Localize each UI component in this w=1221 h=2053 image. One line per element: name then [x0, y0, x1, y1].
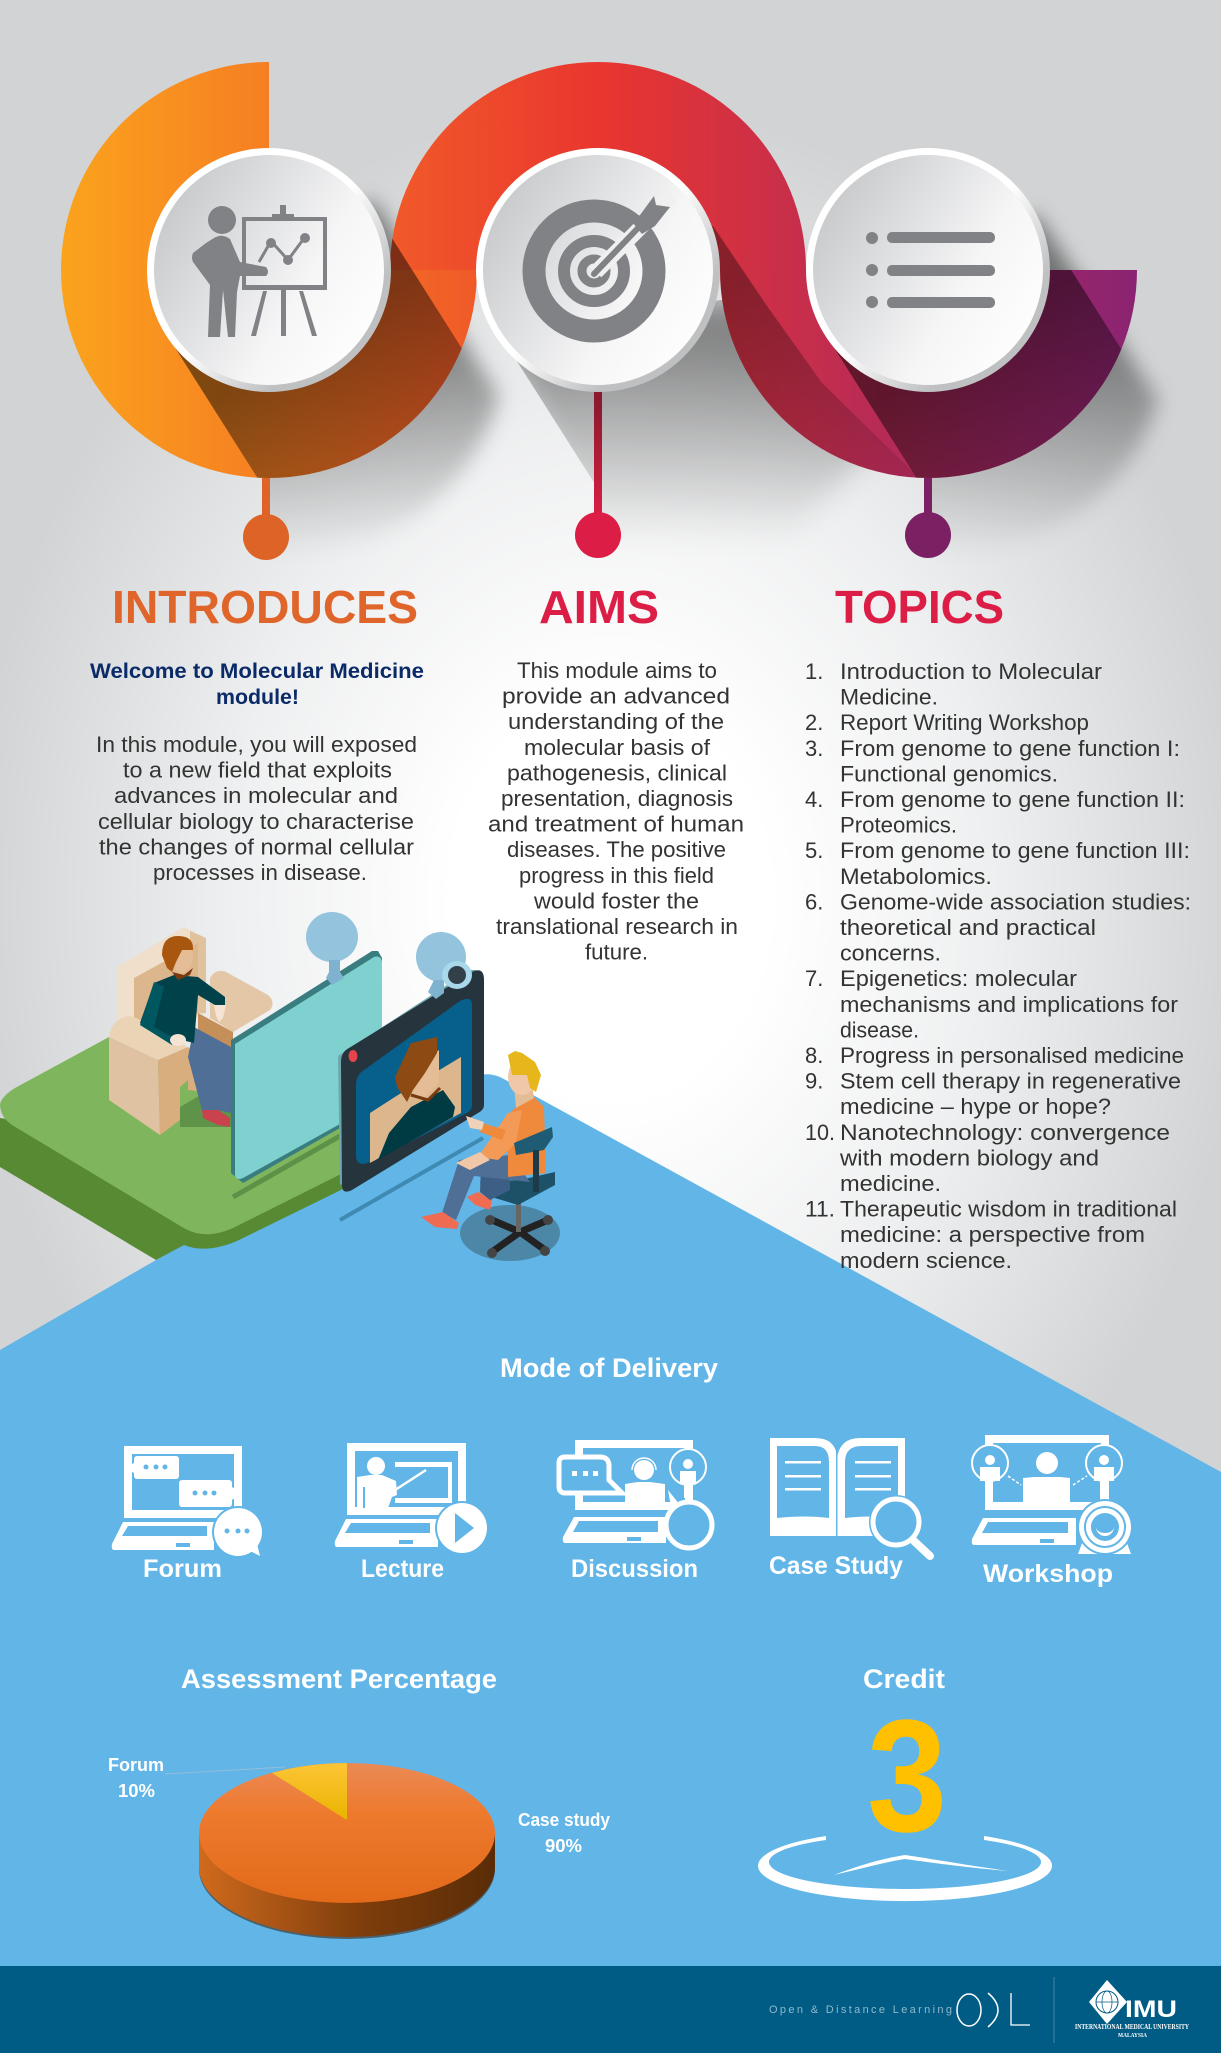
label: forum share: Forum	[108, 1755, 164, 1775]
text block: aims: This module aims to	[517, 658, 717, 683]
text block: aims: pathogenesis, clinical	[507, 760, 727, 785]
ribbon: red segment	[390, 62, 806, 270]
text block: topics list: Epigenetics: molecular	[840, 966, 1077, 991]
text block: topics list: 9.	[805, 1069, 823, 1094]
long shadow: disc 2	[712, 226, 918, 478]
text block: aims: would foster the	[533, 888, 699, 913]
text block: topics list: 10.	[805, 1120, 835, 1145]
text block: aims: translational research in	[496, 914, 738, 939]
stem: topics	[924, 478, 932, 520]
icon: lecture laptop and play	[335, 1443, 489, 1555]
hero ribbon with discs	[61, 62, 1221, 695]
leader line	[165, 1767, 285, 1774]
label: forum: Forum	[143, 1555, 222, 1583]
long shadow: disc 1	[174, 238, 462, 478]
text block: aims	[488, 658, 744, 965]
label: forum share	[108, 1755, 164, 1801]
text block: topics list: From genome to gene function I:	[840, 736, 1180, 761]
text block: aims: molecular basis of	[524, 735, 711, 760]
text block: aims: provide an advanced	[502, 684, 730, 709]
footer: open and distance learning logo	[769, 1993, 1030, 2027]
text block: topics list: mechanisms and implications for	[840, 992, 1178, 1017]
long shadow: disc 3	[834, 270, 1122, 478]
pie slice: case study	[199, 1763, 495, 1903]
label: discussion: Discussion	[571, 1555, 698, 1583]
footer: IMU logo: MALAYSIA	[1118, 2032, 1147, 2039]
footer divider	[1053, 1977, 1055, 2043]
text block: aims: progress in this field	[519, 863, 714, 888]
footer: IMU logo	[1075, 1980, 1189, 2039]
text block: topics list: Genome-wide association studies:	[840, 889, 1191, 914]
label: case study share: 90%	[545, 1836, 582, 1856]
icon: presenter at easel	[192, 205, 326, 337]
text block: introduces: processes in disease.	[153, 860, 367, 885]
credit value: 3	[867, 1686, 947, 1865]
lollipop: introduces	[243, 514, 289, 560]
heading: assessment percentage: Assessment Percentage	[181, 1664, 497, 1694]
text block: topics list: From genome to gene function II:	[840, 787, 1185, 812]
text block: topics list: modern science.	[840, 1248, 1012, 1273]
text block: aims: presentation, diagnosis	[501, 786, 733, 811]
heading: credit: Credit	[863, 1664, 945, 1694]
text block: aims: future.	[585, 940, 648, 965]
icon group: case study	[769, 1438, 930, 1580]
seated man on office chair	[421, 1051, 560, 1261]
illustration: video call scene	[0, 912, 560, 1261]
text block: topics list: Introduction to Molecular	[840, 659, 1102, 684]
text block: topics list: medicine.	[840, 1171, 941, 1196]
label: lecture: Lecture	[361, 1555, 444, 1583]
text block: topics list: 7.	[805, 966, 823, 991]
text block: topics list: theoretical and practical	[840, 915, 1096, 940]
disc: aims	[476, 148, 720, 392]
lollipop: aims	[575, 512, 621, 558]
text block: topics list: Report Writing Workshop	[840, 710, 1089, 735]
green platform	[0, 1037, 345, 1260]
text block: topics list: with modern biology and	[839, 1145, 1099, 1170]
text block: introduces: advances in molecular and	[114, 783, 398, 808]
text block: topics list: 4.	[805, 787, 823, 812]
seated man	[140, 936, 231, 1127]
pie shadow	[199, 1840, 495, 1939]
text block: topics list: disease.	[840, 1017, 919, 1042]
footer: IMU logo: INTERNATIONAL MEDICAL UNIVERSITY	[1075, 2023, 1189, 2031]
label: workshop: Workshop	[983, 1560, 1113, 1588]
text block: topics list: 3.	[805, 736, 823, 761]
teal screen	[231, 912, 382, 1183]
text block: topics list: From genome to gene function III:	[840, 838, 1190, 863]
stem: aims	[594, 385, 602, 520]
icon group: lecture	[335, 1443, 489, 1583]
stem: introduces	[262, 478, 270, 520]
text block: topics list	[805, 659, 1191, 1273]
icon: list	[866, 232, 995, 308]
text block: topics list: 11.	[805, 1197, 835, 1222]
footer bar	[0, 1966, 1221, 2053]
text block: aims: understanding of the	[508, 709, 724, 734]
long shadows on ribbon	[174, 226, 1122, 478]
label: case study share: Case study	[518, 1810, 610, 1830]
text block: aims: and treatment of human	[488, 812, 744, 837]
icon group: forum	[112, 1446, 264, 1583]
armchair	[109, 927, 273, 1135]
label: case study share	[518, 1810, 610, 1856]
lollipop: topics	[905, 512, 951, 558]
text block: topics list: medicine: a perspective from	[840, 1222, 1145, 1247]
pie side	[199, 1833, 495, 1937]
ribbon: purple segment	[720, 270, 1137, 478]
dark video screen	[338, 932, 484, 1192]
text block: topics list: Stem cell therapy in regenerative	[840, 1069, 1181, 1094]
chart: assessment pie	[108, 1755, 610, 1939]
ribbon ground shadows	[95, 140, 1165, 550]
icon: credit pedestal ring	[758, 1836, 1052, 1901]
text block: topics list: Progress in personalised medicine	[840, 1043, 1184, 1068]
heading: introduces: INTRODUCES	[112, 581, 418, 633]
text block: introduces: Welcome to Molecular Medicine	[90, 660, 424, 683]
text block: topics list: 1.	[805, 659, 823, 684]
icon group: discussion	[559, 1440, 712, 1583]
text block: introduces: cellular biology to characterise	[98, 809, 414, 834]
footer: open and distance learning logo: Open & Distance Learning	[769, 2004, 952, 2016]
label: forum share: 10%	[118, 1781, 155, 1801]
text block: topics list: 6.	[805, 889, 823, 914]
text block: topics list: 8.	[805, 1043, 823, 1068]
text block: topics list: Therapeutic wisdom in traditional	[840, 1197, 1177, 1222]
text block: introduces	[90, 660, 424, 885]
heading: aims: AIMS	[539, 581, 659, 633]
blue floor shadow line	[340, 1138, 483, 1220]
text block: introduces: In this module, you will exposed	[96, 732, 417, 757]
disc: introduces	[147, 148, 391, 392]
icon: open book and magnifier	[770, 1438, 930, 1556]
icon: discussion laptop and bubbles	[559, 1440, 712, 1548]
text block: aims: diseases. The positive	[507, 837, 726, 862]
text block: topics list: Proteomics.	[840, 813, 957, 838]
ribbon: orange segment	[61, 62, 477, 478]
text block: topics list: Functional genomics.	[840, 761, 1058, 786]
text block: topics list: Nanotechnology: convergence	[840, 1120, 1170, 1145]
text block: introduces: module!	[216, 686, 299, 709]
label: case study: Case Study	[769, 1552, 903, 1580]
heading: mode of delivery: Mode of Delivery	[500, 1353, 718, 1383]
footer: IMU logo: IMU	[1125, 1996, 1177, 2023]
text block: topics list: Metabolomics.	[840, 864, 992, 889]
text block: topics list: medicine – hype or hope?	[840, 1094, 1111, 1119]
icon: workshop laptop with webcam	[972, 1435, 1133, 1555]
text block: topics list: 5.	[805, 838, 823, 863]
icon: target with arrow	[534, 196, 672, 331]
icon: forum laptop and chat	[112, 1446, 264, 1558]
pie slice: forum	[272, 1763, 347, 1820]
text block: topics list: Medicine.	[840, 685, 938, 710]
text block: topics list: concerns.	[840, 941, 941, 966]
text block: introduces: to a new field that exploits	[123, 758, 392, 783]
icon group: workshop	[972, 1435, 1133, 1588]
text block: introduces: the changes of normal cellular	[99, 834, 414, 859]
disc: topics	[806, 148, 1050, 392]
text block: topics list: 2.	[805, 710, 823, 735]
blue lower panel	[0, 1074, 1221, 1967]
heading: topics: TOPICS	[835, 581, 1004, 633]
